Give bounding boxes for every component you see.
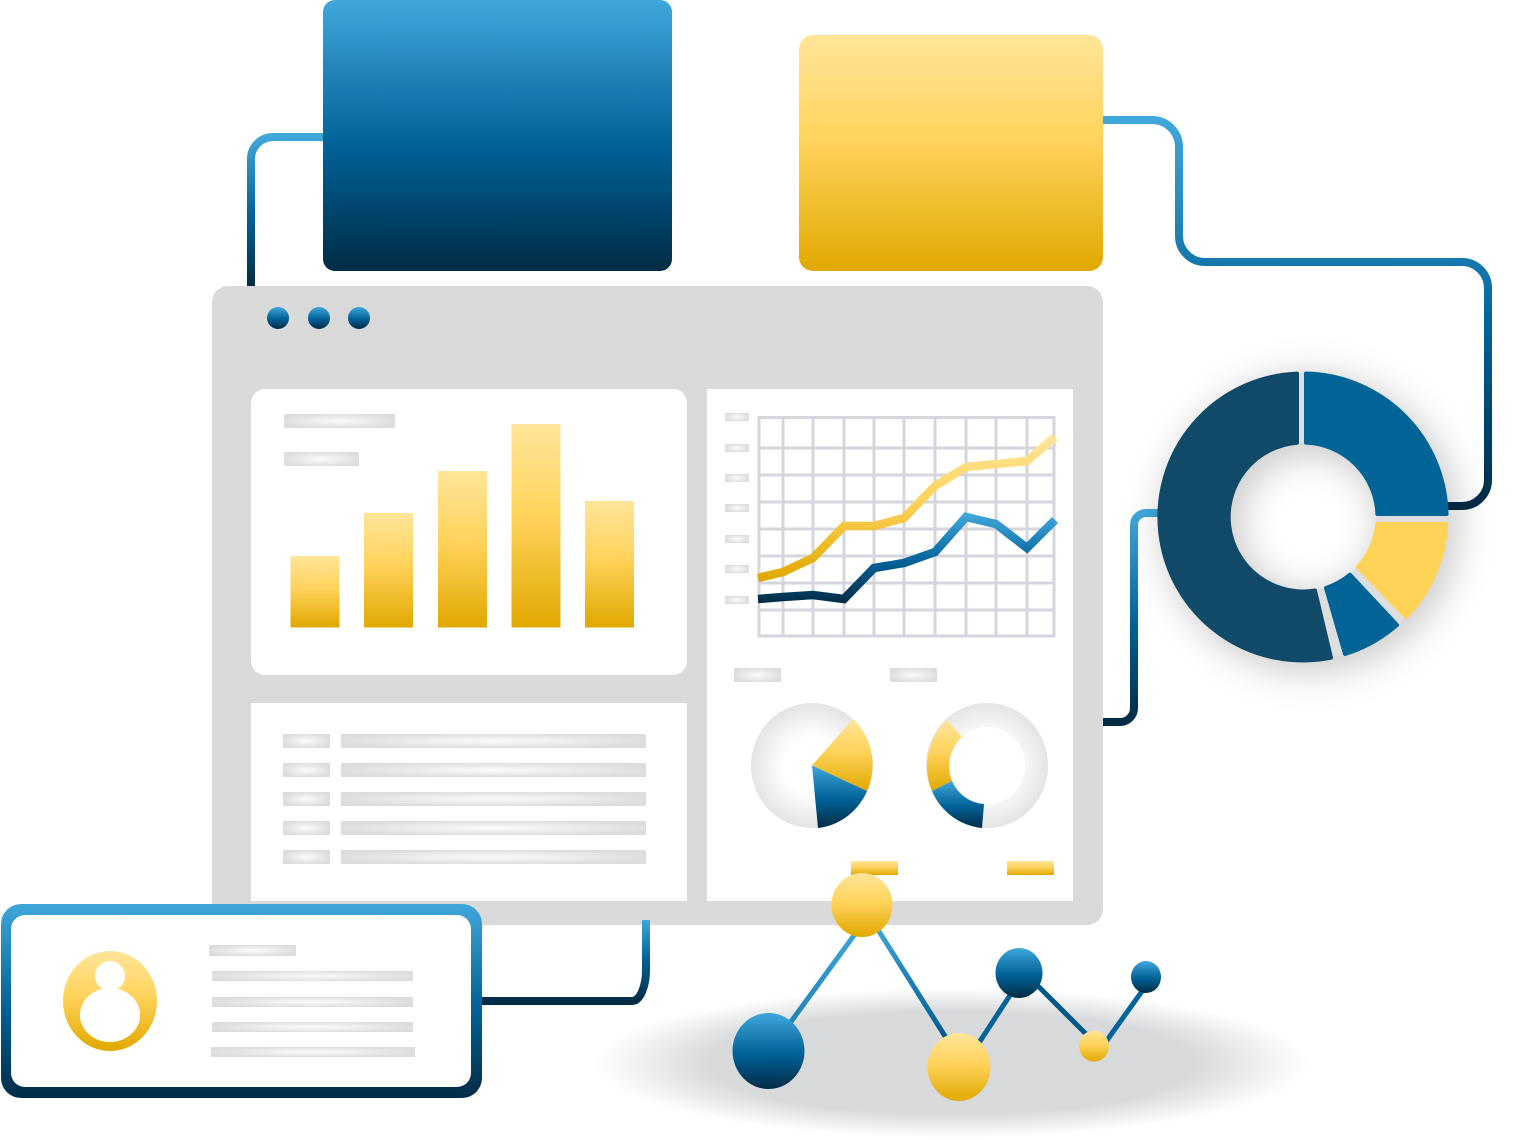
yellow legend swatches (851, 861, 1054, 875)
bars (290, 424, 634, 628)
profile card (1, 904, 482, 1098)
panel: bar chart (251, 389, 687, 675)
yellow box (799, 35, 1103, 271)
connector: dashboard to donut (1103, 513, 1160, 722)
row placeholders (283, 734, 646, 864)
line chart grid (759, 417, 1054, 636)
window controls (267, 307, 370, 329)
icon: user avatar (63, 951, 157, 1051)
network nodes (732, 873, 1161, 1101)
donut chart large (1159, 374, 1446, 660)
connector: blue box to dashboard (251, 137, 324, 286)
connector: dashboard to profile card (478, 920, 646, 1001)
segment: navy (1159, 374, 1331, 660)
network links (782, 923, 1150, 1055)
pie chart labels (734, 668, 937, 682)
network graph (732, 873, 1161, 1101)
card text placeholders (209, 945, 415, 1057)
blue box (323, 0, 672, 271)
connector: yellow box to donut (1103, 120, 1488, 506)
segment: blue (1306, 374, 1446, 514)
dashboard window (212, 286, 1103, 925)
donut chart small (926, 703, 1048, 828)
ground shadow (594, 988, 1310, 1138)
segment: small blue (1326, 575, 1397, 654)
bar chart title placeholders (284, 414, 395, 466)
pie chart (751, 703, 873, 828)
line series: yellow (758, 437, 1055, 578)
panel: table rows (251, 703, 687, 901)
axis labels (725, 413, 749, 604)
line series: blue (758, 517, 1055, 599)
panel: charts (707, 389, 1073, 901)
segment: yellow (1358, 524, 1446, 617)
